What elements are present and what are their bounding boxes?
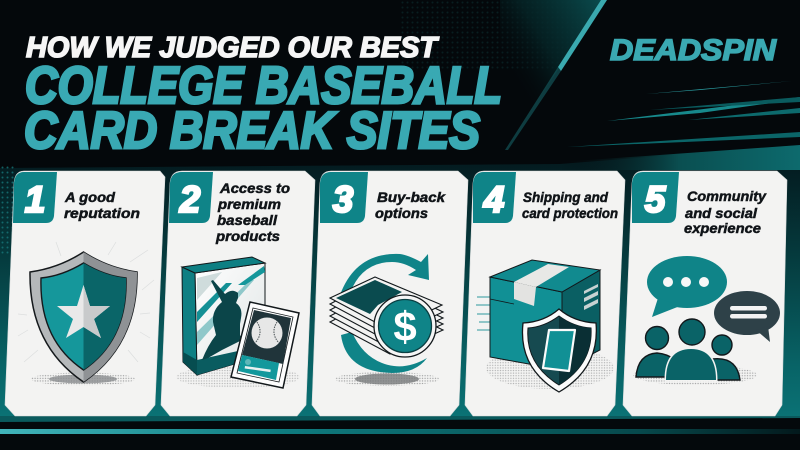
card 2 label: products	[215, 228, 280, 244]
card 3 label: options	[375, 205, 428, 221]
panel: card 2 premium products	[161, 171, 315, 416]
card 4 label	[522, 189, 618, 221]
number tab 4: 4	[483, 179, 504, 220]
number tab 5	[632, 172, 679, 223]
number tab 1: 1	[25, 179, 45, 220]
card 3 label: Buy-back	[377, 189, 446, 205]
number tab 4	[473, 172, 516, 223]
icon: card box and baseball card	[176, 257, 300, 388]
batter silhouette	[202, 280, 242, 360]
title line: card break sites: CARD BREAK SITES	[24, 102, 480, 160]
panel: card 1 reputation	[5, 171, 165, 416]
card 5 label: experience	[684, 220, 761, 236]
card 2 label: Access to	[219, 180, 290, 196]
logo: Deadspin: DEADSPIN	[610, 34, 777, 67]
number tab 5: 5	[645, 179, 667, 220]
card 3 label	[375, 189, 446, 221]
card 2 label	[215, 180, 290, 244]
card 2 label: baseball	[217, 212, 278, 228]
card 5 label: Community	[687, 188, 767, 204]
icon: shield with star	[18, 242, 154, 386]
panel: card 5 community	[623, 171, 787, 416]
title line: college baseball: COLLEGE BASEBALL	[25, 57, 502, 115]
card 4 label: card protection	[522, 205, 618, 221]
number tab 2	[169, 172, 213, 223]
card 5 label	[684, 188, 767, 236]
number tab 2: 2	[179, 179, 201, 220]
card 1 label: A good	[64, 189, 115, 205]
number tab 1	[13, 172, 57, 223]
title line: how we judged: HOW WE JUDGED OUR BEST	[26, 32, 439, 64]
card 2 label: premium	[217, 196, 281, 212]
icon: shipping box with shield	[476, 260, 614, 392]
panel: card 3 buy-back	[312, 171, 468, 416]
trading card	[231, 302, 299, 388]
panel: card 4 shipping	[465, 171, 625, 416]
card 4 label: Shipping and	[523, 189, 608, 205]
card 1 label	[64, 189, 140, 221]
card 5 label: and social	[685, 205, 758, 221]
card 1 label: reputation	[64, 205, 140, 221]
number tab 3	[320, 172, 368, 223]
icon: chat bubbles and people	[633, 256, 780, 385]
title	[24, 32, 502, 160]
icon: cash stack with return arrow	[330, 254, 443, 386]
number tab 3: 3	[333, 179, 354, 220]
icon: cash stack with return arrow: $	[393, 303, 417, 350]
